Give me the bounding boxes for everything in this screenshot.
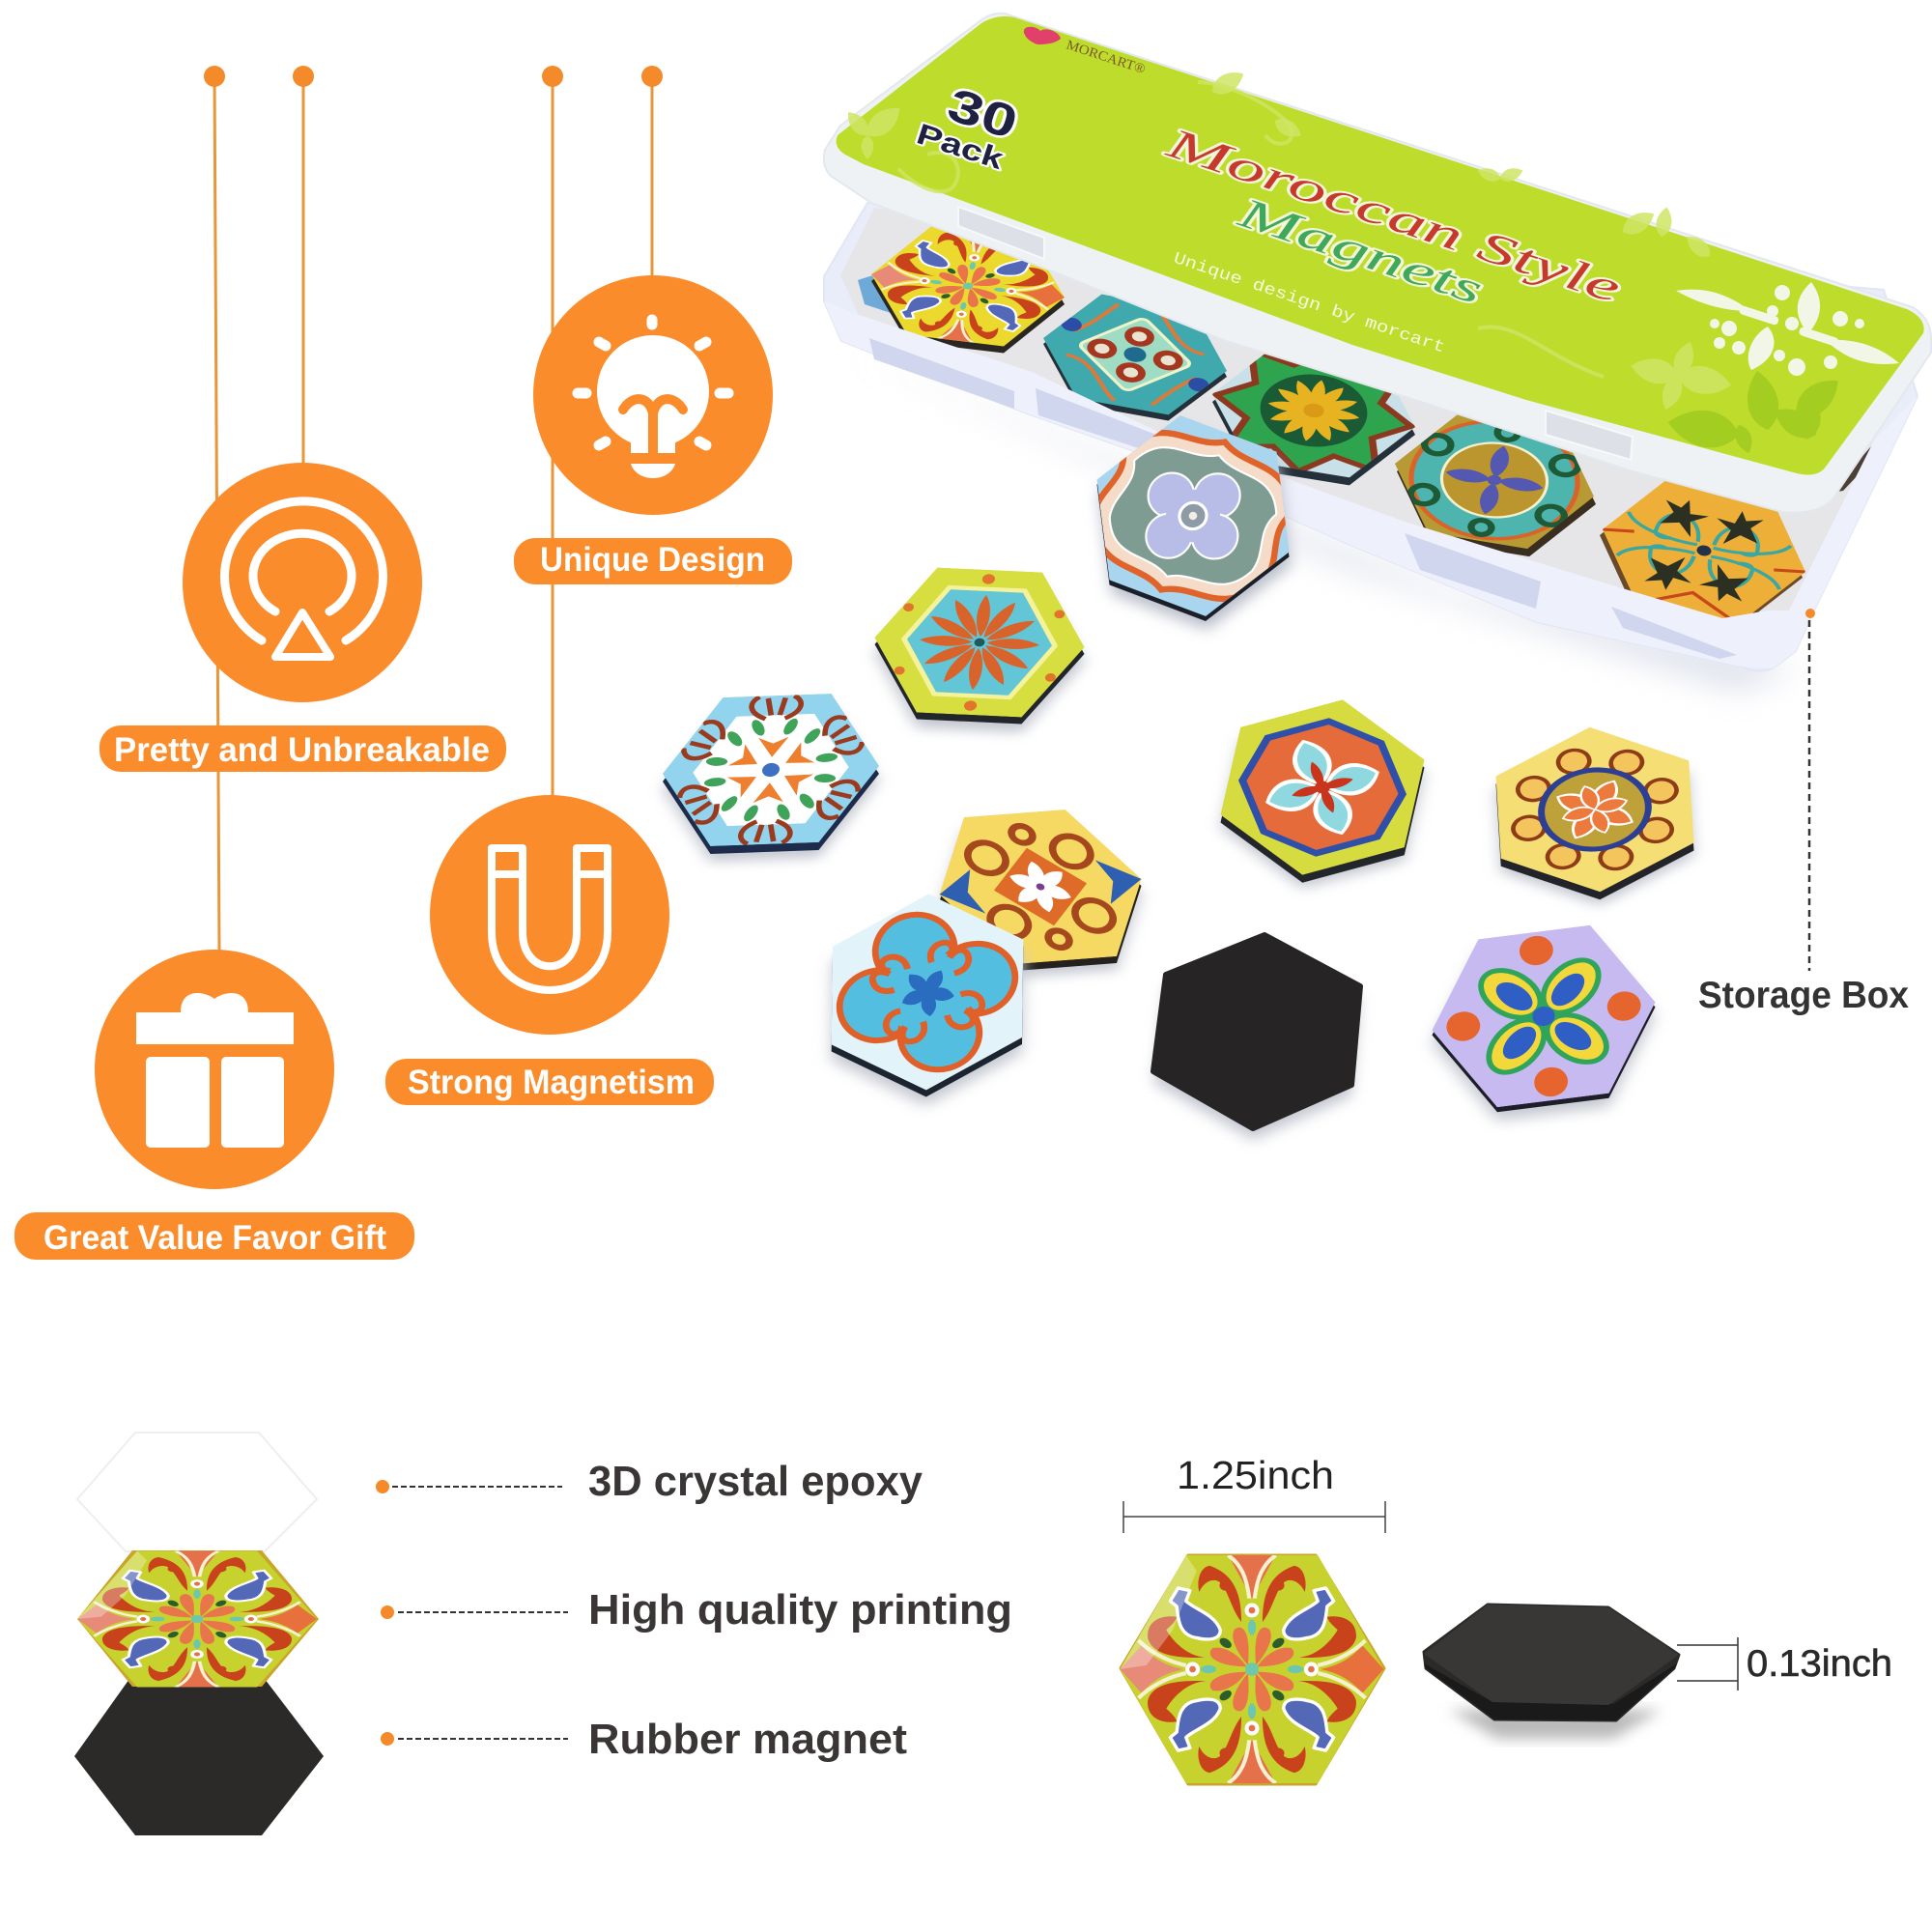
30 Pack badge: Pack — [913, 118, 1008, 176]
green lid — [837, 16, 1924, 474]
logo on lid: MORCART® — [1065, 39, 1148, 77]
layer: crystal epoxy — [77, 1433, 317, 1551]
storage box callout — [1698, 609, 1909, 1016]
box shadow — [850, 353, 1797, 691]
thickness dimension — [1677, 1637, 1892, 1690]
lid clasps — [958, 207, 1633, 460]
icon: horseshoe magnet — [492, 848, 608, 990]
loose tile: black magnet back — [1153, 935, 1360, 1140]
loose tile: lime and aqua — [852, 554, 1107, 735]
lid floral decorations — [842, 66, 1847, 456]
lid title: Moroccan Style: Moroccan Style — [1160, 118, 1626, 312]
label pill: Unique Design — [514, 538, 792, 584]
width dimension — [1123, 1453, 1385, 1533]
label pill: Great Value Favor Gift: Great Value Favor Gift — [43, 1219, 386, 1257]
loose tile: aqua quatrefoil — [767, 856, 1088, 1128]
loose tile: yellow and orange — [899, 794, 1181, 981]
feature: Unique Design — [514, 275, 792, 584]
layered structure diagram — [74, 1433, 324, 1835]
lid title: Magnets: Magnets — [1232, 187, 1489, 314]
clear lid rim — [824, 14, 1931, 513]
storage box callout: Storage Box — [1698, 975, 1909, 1016]
width dimension: 1.25inch — [1177, 1453, 1334, 1497]
icon: rings and triangle — [224, 501, 383, 657]
loose tile: lavender — [1410, 904, 1677, 1128]
tray — [824, 203, 1918, 671]
layer: rubber magnet — [74, 1679, 324, 1835]
label pill: Strong Magnetism: Strong Magnetism — [408, 1064, 695, 1101]
logo on lid — [1024, 27, 1148, 77]
tile piece behind — [858, 273, 894, 314]
label pill: Unique Design: Unique Design — [540, 541, 765, 579]
tiles inside box — [859, 219, 1871, 646]
magnet side sample — [1424, 1605, 1679, 1739]
white fleur ornament — [1676, 282, 1899, 376]
callout: High quality printing — [381, 1586, 1012, 1634]
tray interior — [840, 208, 1874, 618]
thickness dimension: 0.13inch — [1747, 1643, 1892, 1685]
callout: High quality printing: High quality printing — [588, 1586, 1012, 1634]
icon: light bulb — [578, 320, 728, 478]
hanging string lines — [204, 66, 663, 952]
30 Pack badge — [913, 79, 1023, 176]
loose tile: front of box — [1046, 382, 1340, 650]
icon: gift box — [136, 993, 294, 1148]
lid tagline: Unique design by morcart — [1171, 250, 1447, 357]
tray front wall — [824, 301, 1918, 668]
callout: 3D crystal epoxy: 3D crystal epoxy — [588, 1458, 923, 1505]
label pill: Pretty and Unbreakable: Pretty and Unbreakable — [114, 731, 490, 769]
30 Pack badge: 30 — [942, 79, 1023, 150]
front tile sample — [1121, 1555, 1384, 1784]
storage box — [824, 14, 1931, 691]
callout: Rubber magnet: Rubber magnet — [588, 1716, 907, 1763]
callout: Rubber magnet — [381, 1716, 907, 1763]
loose tile: orange octagon — [1175, 672, 1470, 902]
loose tile: sky blue and white — [644, 680, 897, 864]
layer: printed pattern — [77, 1550, 319, 1687]
callout: 3D crystal epoxy — [376, 1458, 923, 1505]
feature: Pretty and Unbreakable — [99, 463, 506, 772]
loose tile: gold scallop — [1435, 697, 1755, 923]
feature: Great Value Favor Gift — [14, 950, 414, 1260]
feature: Strong Magnetism — [385, 795, 714, 1105]
tray compartment slots — [869, 338, 1737, 659]
